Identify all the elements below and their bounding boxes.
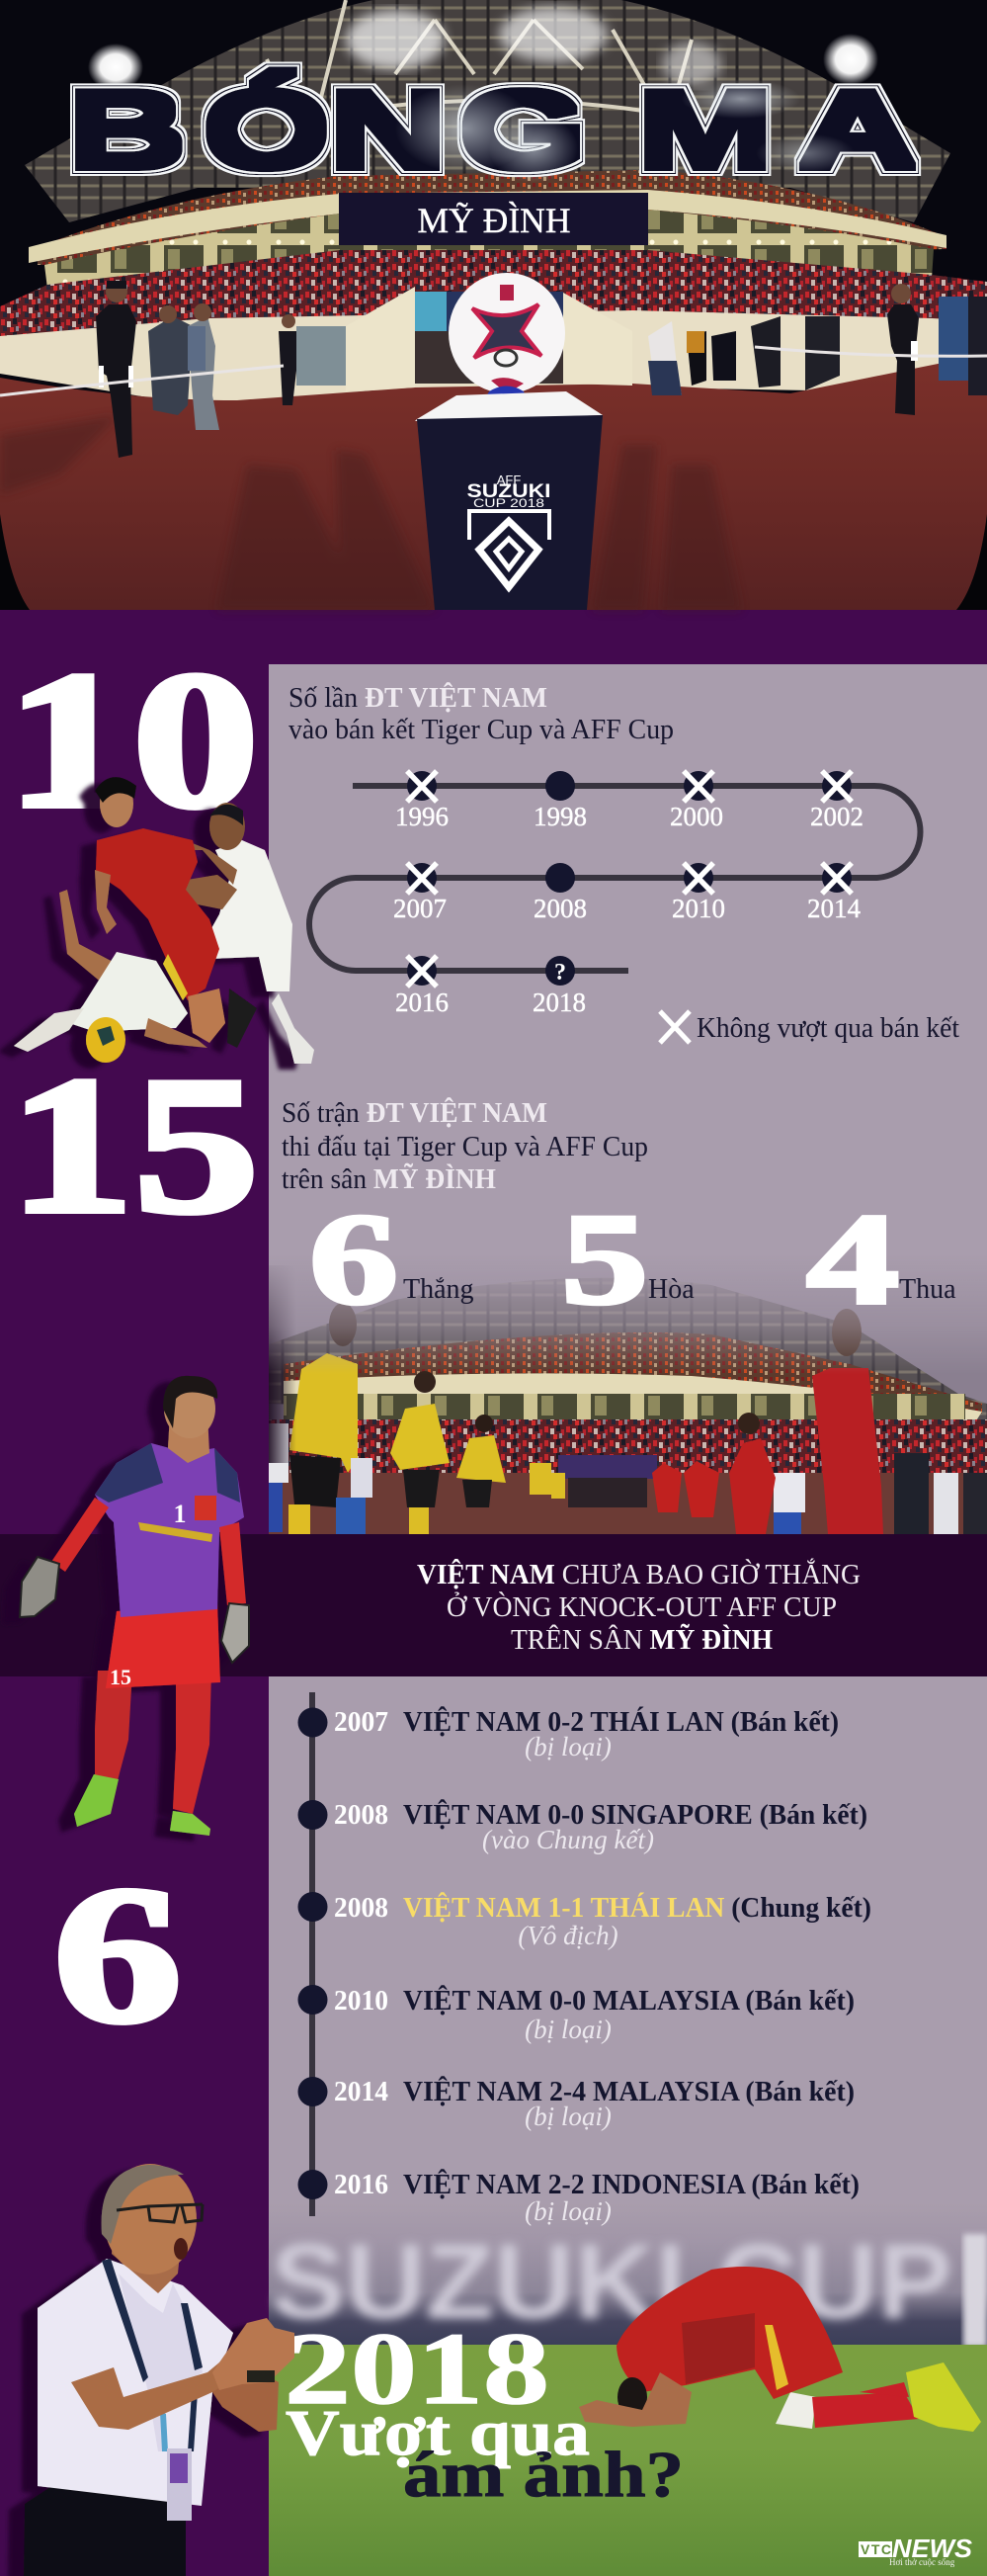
match 2014: (bị loại) [525, 2102, 612, 2131]
node row 1 [395, 771, 864, 831]
node row 3: ? [554, 960, 566, 986]
white sign edge [963, 2234, 987, 2348]
big number 15: 15 [9, 1037, 259, 1253]
pitch side ground [269, 1473, 987, 1535]
callout band: never won knock-out: TRÊN SÂN MỸ ĐÌNH [511, 1622, 773, 1656]
match 2007: (bị loại) [525, 1732, 612, 1761]
title: BÓNG MA: G [459, 68, 586, 191]
subtitle box: MỸ ĐÌNH: MỸ ĐÌNH [417, 201, 571, 240]
ball stand [480, 386, 531, 411]
floodlights [88, 43, 143, 91]
fisheye vignette corners [0, 514, 987, 610]
stand windows [44, 210, 934, 289]
centre banner and tunnel [558, 1455, 657, 1479]
red kit player [95, 777, 257, 1048]
match 2014: 2014 [334, 2077, 388, 2107]
callout band: never won knock-out [0, 1534, 987, 1676]
pedestal: SUZUKI [466, 481, 551, 502]
node row 1: 1996 [395, 802, 449, 831]
match 2010: 2010 [334, 1986, 388, 2017]
node row 2: 2007 [393, 894, 447, 923]
security guard right [887, 284, 919, 415]
node row 2: 2014 [807, 894, 862, 923]
panel: stadium walkout photo [269, 1255, 987, 1535]
section 2 heading [282, 1098, 648, 1195]
big number 6 wins [309, 1186, 474, 1331]
track shadows [0, 415, 741, 610]
Vietnam players [652, 1309, 883, 1534]
callout band: never won knock-out: Ở VÒNG KNOCK-OUT AFF CUP [447, 1590, 837, 1623]
cream stand band [29, 190, 946, 263]
node row 3: 2016 [395, 987, 449, 1017]
blurred sponsor board: SUZUKI CUP [271, 2221, 952, 2341]
timeline: semi-final appearances [309, 771, 920, 1017]
big number 4 losses [806, 1186, 956, 1331]
stadium roof [25, 0, 950, 222]
match 2008 final: VIỆT NAM 1-1 THÁI LAN (Chung kết) [403, 1893, 871, 1924]
section 1 heading: vào bán kết Tiger Cup và AFF Cup [288, 715, 674, 745]
lower crowd [0, 250, 987, 341]
match 2010 [298, 1985, 855, 2044]
section 1 heading [288, 683, 674, 745]
node row 1: 2000 [670, 802, 723, 831]
timeline: knock-out matches at My Dinh [298, 1692, 871, 2226]
player photo: goalkeeper [20, 1376, 249, 1836]
match 2007: 2007 [334, 1707, 388, 1738]
title: BÓNG MA: N [329, 68, 447, 191]
node row 3 [395, 956, 586, 1017]
panel: football photo backdrop [269, 2204, 987, 2576]
roof [269, 1278, 987, 1423]
title: BÓNG MA: M [637, 68, 773, 191]
barrier rope [0, 347, 987, 395]
coach photo [24, 2164, 294, 2576]
title: BÓNG MA: Ó [204, 68, 330, 191]
big number 5 draws [561, 1186, 695, 1331]
panel: grey content background [269, 664, 987, 2576]
match 2010: VIỆT NAM 0-0 MALAYSIA (Bán kết) [403, 1986, 855, 2017]
node row 1: 1998 [534, 802, 587, 831]
logo: VTC News: VTC [861, 2541, 891, 2557]
track [0, 354, 987, 610]
node row 2: 2008 [534, 894, 587, 923]
white kit player [138, 803, 314, 1064]
title smoke overlay [395, 79, 855, 183]
big number 10: 10 [6, 632, 259, 848]
match 2007 [298, 1707, 839, 1761]
match 2016: (bị loại) [525, 2196, 612, 2226]
left edge shade [269, 1265, 296, 1463]
subtitle box: MỸ ĐÌNH [339, 193, 648, 245]
match 2016 [298, 2170, 860, 2226]
pedestal logo text: AFF [497, 472, 521, 487]
match 2008 final: 2008 [334, 1893, 388, 1924]
heading: Vượt qua: Vượt qua [286, 2397, 590, 2469]
match 2008 final: (Vô địch) [518, 1921, 618, 1950]
match 2008 semi-final: VIỆT NAM 0-0 SINGAPORE (Bán kết) [403, 1800, 867, 1831]
player photo: goalkeeper: 15 [110, 1665, 131, 1689]
heading: ám ảnh?: ám ảnh? [403, 2439, 684, 2511]
section 2 heading: Số trận ĐT VIỆT NAM [282, 1098, 547, 1129]
roof floodlit trusses [267, 0, 692, 124]
player photo: tackling footballers [14, 777, 314, 1064]
spectators left [148, 303, 296, 430]
match 2014: VIỆT NAM 2-4 MALAYSIA (Bán kết) [403, 2077, 855, 2107]
section 1 heading: Số lần ĐT VIỆT NAM [288, 683, 547, 714]
title: BÓNG MA: A [798, 68, 917, 191]
match 2008 semi-final: (vào Chung kết) [482, 1825, 654, 1854]
legend: not past semi-final: Không vượt qua bán kết [697, 1013, 959, 1044]
logo: VTC News [859, 2533, 973, 2567]
title: BÓNG MA: B [68, 68, 186, 191]
player tunnel and banners [296, 287, 632, 391]
section 2 heading: trên sân MỸ ĐÌNH [282, 1163, 496, 1195]
spectators right [648, 297, 987, 395]
security guard left [96, 281, 136, 458]
pedestal: CUP 2018 [473, 496, 544, 510]
big number 6: 6 [53, 1846, 182, 2063]
player photo: goalkeeper: 1 [174, 1500, 186, 1528]
match 2016: 2016 [334, 2170, 388, 2200]
node row 2: 2010 [672, 894, 725, 923]
pedestal [415, 391, 603, 610]
match 2008 semi-final [298, 1800, 867, 1854]
vertical axis [309, 1692, 315, 2216]
section 2 heading: thi đấu tại Tiger Cup và AFF Cup [282, 1132, 648, 1162]
stand band and windows [284, 1373, 982, 1419]
staff on right [894, 1453, 987, 1534]
big number 6 wins: 6 [309, 1186, 398, 1331]
match 2010: (bị loại) [525, 2015, 612, 2044]
big number 4 losses: 4 [806, 1186, 899, 1331]
match 2008 semi-final: 2008 [334, 1800, 388, 1831]
heading: 2018: 2018 [285, 2312, 549, 2426]
pedestal logo emblem [469, 511, 549, 587]
concrete wall [0, 310, 987, 405]
logo: VTC News: Hơi thở cuộc sống [889, 2557, 955, 2567]
label losses: Thua [899, 1274, 956, 1305]
label wins: Thắng [403, 1274, 474, 1305]
node row 1: 2002 [810, 802, 864, 831]
sliding player [14, 890, 207, 1063]
kneeling player photo [579, 2267, 981, 2432]
title: BÓNG MA [68, 68, 917, 191]
upper crowd [38, 170, 946, 265]
match 2016: VIỆT NAM 2-2 INDONESIA (Bán kết) [403, 2170, 860, 2200]
child escorts [269, 1423, 805, 1535]
timeline track [309, 786, 920, 971]
big number 5 draws: 5 [561, 1186, 648, 1331]
match 2014 [298, 2077, 855, 2131]
lower tier crowd [269, 1419, 987, 1477]
label draws: Hòa [648, 1274, 695, 1305]
coach glasses [117, 2204, 203, 2222]
logo: VTC News: NEWS [892, 2533, 973, 2563]
match ball [449, 273, 565, 393]
grass [269, 2345, 987, 2576]
match 2007: VIỆT NAM 0-2 THÁI LAN (Bán kết) [403, 1707, 839, 1738]
upper tier crowd [284, 1332, 982, 1414]
panel: hero stadium photo [0, 0, 987, 610]
node row 3: 2018 [533, 987, 586, 1017]
node row 2 [393, 863, 862, 923]
match 2008 final [298, 1892, 871, 1950]
callout band: never won knock-out: VIỆT NAM CHƯA BAO GIỜ THẮNG [417, 1557, 861, 1590]
Malaysia players [288, 1303, 565, 1535]
